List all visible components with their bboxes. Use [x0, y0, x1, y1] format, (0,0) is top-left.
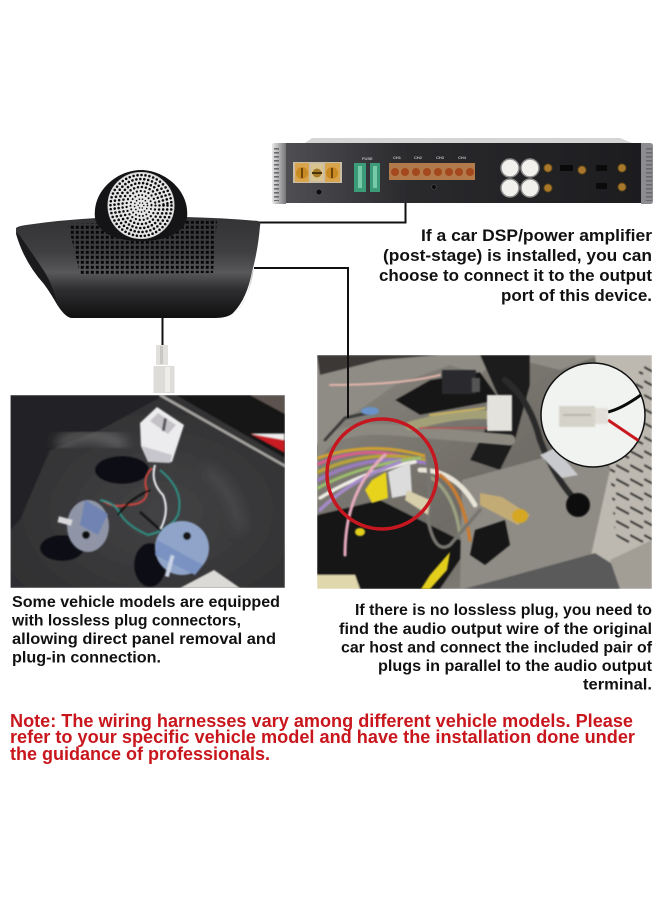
text: amplifier connection note: port of this device.	[501, 286, 652, 305]
speaker channel terminals: CH1	[393, 155, 402, 160]
text: no lossless plug explanation: car host and connect the included pair of	[341, 640, 653, 656]
speaker channel terminals: CH2	[414, 155, 423, 160]
text: no lossless plug explanation: find the audio output wire of the original	[339, 621, 652, 638]
callout: red circle highlighting audio wires	[327, 419, 437, 529]
text: amplifier connection note: If a car DSP/power amplifier	[421, 226, 652, 245]
speaker channel terminals	[389, 155, 475, 190]
speaker channel terminals: CH3	[436, 155, 445, 160]
text: lossless plug explanation	[11, 594, 280, 666]
photo: car host wiring	[317, 355, 652, 589]
icon: speaker tweeter grille	[108, 172, 174, 238]
text: lossless plug explanation: Some vehicle models are equipped	[12, 594, 280, 611]
connecting line: speaker to amplifier	[258, 186, 406, 222]
text: no lossless plug explanation: plugs in parallel to the audio output	[378, 658, 652, 675]
plug in photo	[140, 407, 184, 463]
connecting line tip over photo	[347, 355, 349, 418]
text: amplifier connection note	[379, 226, 652, 305]
text: red professional installation note: Note: The wiring harnesses vary among different vehicle models. Please	[10, 711, 633, 731]
inset: white plug close-up	[541, 363, 650, 467]
speaker channel terminals: CH4	[458, 155, 467, 160]
text: red professional installation note: refer to your specific vehicle model and have the installation done under	[10, 727, 635, 747]
text: no lossless plug explanation: If there is no lossless plug, you need to	[355, 602, 652, 619]
fuses	[354, 156, 380, 192]
text: red professional installation note: the guidance of professionals.	[10, 744, 270, 764]
heat sinks	[272, 143, 653, 204]
text: no lossless plug explanation: terminal.	[583, 676, 652, 694]
control knobs and switches	[544, 164, 626, 192]
fuses: FUSE	[362, 156, 373, 161]
wires in photo	[88, 465, 180, 548]
text: lossless plug explanation: plug-in connection.	[12, 650, 161, 666]
amplifier	[272, 138, 653, 204]
connecting line: speaker to plug	[162, 316, 164, 346]
disc right in photo	[155, 521, 240, 588]
power terminal block	[293, 162, 342, 195]
text: amplifier connection note: choose to connect it to the output	[379, 266, 652, 285]
icon: speaker unit	[16, 170, 260, 318]
text: amplifier connection note: (post-stage) is installed, you can	[383, 246, 652, 265]
photo: lossless plug connector	[10, 395, 285, 588]
wire bundles in photo	[318, 375, 580, 555]
text: red professional installation note	[10, 711, 635, 764]
text: lossless plug explanation: with lossless plug connectors,	[11, 612, 241, 630]
connecting line: speaker to wiring photo	[254, 268, 348, 420]
RCA inputs	[501, 159, 539, 197]
text: lossless plug explanation: allowing direct panel removal and	[12, 631, 276, 648]
icon: white plug connector	[154, 345, 174, 393]
knob left in photo	[57, 500, 109, 552]
text: no lossless plug explanation	[339, 602, 653, 694]
connectors and tape in photo	[355, 370, 590, 589]
